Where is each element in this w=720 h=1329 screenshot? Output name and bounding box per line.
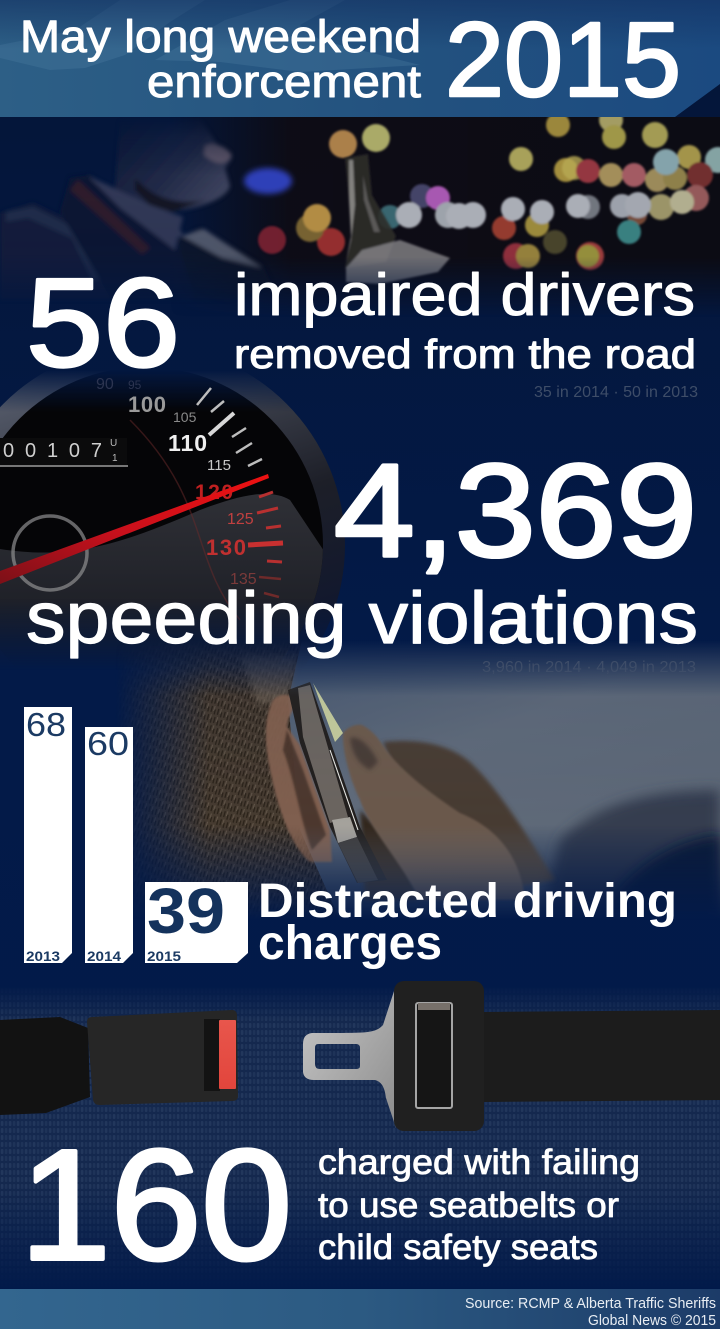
stat: speeding violations (26, 437, 698, 676)
speed scale numbers: 135 (230, 571, 257, 588)
driver silhouette (0, 130, 262, 282)
bar 2013: 68 (26, 706, 66, 743)
right belt strap (484, 1010, 720, 1102)
photo: man on phone (126, 646, 720, 910)
number 56: 56 (26, 252, 180, 393)
comparison years: 35 in 2014 · 50 in 2013 (534, 384, 698, 401)
bar 2014 (85, 725, 133, 964)
title (20, 11, 422, 107)
odometer ring (13, 516, 87, 590)
source credit (465, 1296, 716, 1329)
comparison years: 3,960 in 2014 · 4,049 in 2013 (482, 659, 696, 676)
bar 2014: 2014 (87, 948, 121, 964)
label speeding: speeding violations (26, 578, 698, 659)
photo: night driver with bottle and bokeh lights (0, 108, 720, 317)
speed tick marks (197, 388, 283, 597)
label impaired: impaired drivers (234, 262, 695, 328)
source credit: Global News © 2015 (588, 1313, 716, 1329)
speed scale numbers (96, 376, 257, 588)
title: May long weekend (20, 11, 421, 62)
odometer: U (110, 438, 117, 449)
left belt strap (0, 1017, 90, 1115)
header banner (0, 0, 720, 119)
bar 2014: 60 (87, 725, 129, 762)
map pattern (0, 0, 420, 72)
label seatbelts: child safety seats (318, 1228, 598, 1267)
bar 2015: 39 (147, 875, 225, 947)
label distracted: Distracted driving (258, 875, 677, 928)
odometer: 00107 (3, 440, 102, 462)
speed scale numbers: 120 (195, 481, 233, 504)
speed scale numbers: 130 (206, 535, 246, 560)
sublabel removed: removed from the road (234, 331, 696, 377)
number 4,369: 4,369 (334, 437, 697, 584)
bar 2015: 2015 (147, 948, 181, 964)
bar 2013: 2013 (26, 948, 60, 964)
icon: blue blur light (244, 168, 292, 194)
icon: bottle (345, 154, 450, 284)
label seatbelts (318, 1143, 640, 1267)
needle (0, 474, 269, 584)
label seatbelts: charged with failing (318, 1143, 640, 1182)
bar 2013 (24, 706, 72, 964)
speed scale numbers: 100 (128, 392, 166, 417)
speed scale numbers: 95 (128, 378, 142, 392)
label distracted: charges (258, 917, 442, 970)
speed scale numbers: 115 (207, 457, 231, 474)
source credit: Source: RCMP & Alberta Traffic Sheriffs (465, 1296, 716, 1312)
title: enforcement (147, 56, 422, 107)
odometer: 1 (112, 453, 118, 464)
right buckle housing (394, 981, 484, 1131)
number 160: 160 (20, 1118, 292, 1293)
label seatbelts: to use seatbelts or (318, 1186, 619, 1225)
left buckle body (87, 1010, 238, 1105)
photo: seatbelt on fabric (0, 981, 720, 1289)
metal tongue (303, 988, 396, 1128)
odometer (0, 438, 128, 467)
bar chart: distracted driving charges (24, 706, 677, 970)
speed scale numbers: 105 (173, 409, 197, 425)
footer band (0, 1289, 720, 1329)
label distracted (258, 875, 677, 970)
year: 2015 (445, 1, 681, 119)
speed scale numbers: 125 (227, 511, 254, 528)
speed scale numbers: 110 (168, 430, 207, 456)
speed scale numbers: 90 (96, 376, 114, 393)
phone hand and ear (266, 682, 555, 900)
stat: impaired drivers (26, 252, 698, 401)
stat: seatbelts (20, 1118, 640, 1293)
bar 2015 (145, 875, 248, 964)
photo: speedometer (0, 374, 345, 656)
